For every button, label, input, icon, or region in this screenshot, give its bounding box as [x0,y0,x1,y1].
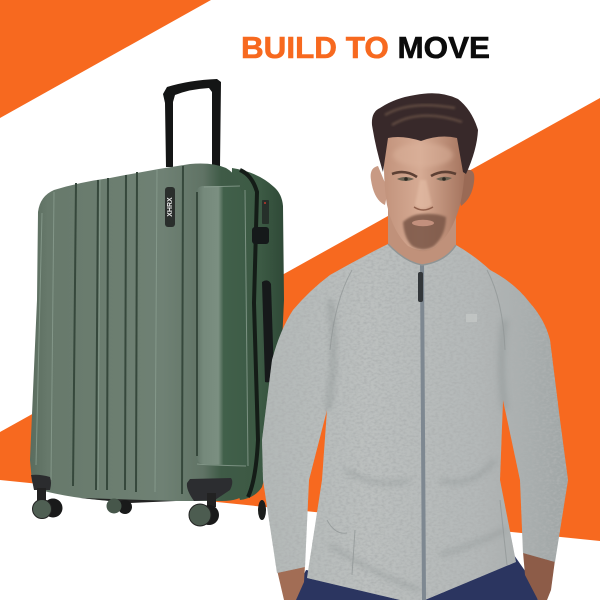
rear wheel behind [258,500,266,520]
lock [252,200,269,244]
zip pull [418,272,423,302]
forearm: left hand [277,565,305,600]
left wheel assembly [31,475,62,518]
case corner bumper [197,186,248,466]
shell light ridges [36,170,248,492]
middle wheel assembly [80,498,176,514]
forearm: right hand [523,552,555,600]
telescopic handle [163,79,221,167]
orange triangle: top left [0,0,211,118]
nose [415,180,432,208]
hair highlights [385,105,462,125]
side carry handle [262,280,274,382]
jacket seams and folds [327,270,507,575]
case front shell [30,164,252,501]
neck [388,205,456,271]
brand badge: XHRX [167,197,174,217]
jacket soft shadows [328,300,505,590]
suitcase [30,79,284,526]
beard [403,214,446,250]
brand badge [165,187,175,227]
ears [371,166,388,205]
jacket [262,244,568,600]
man [262,93,568,600]
zipper seam [240,170,258,497]
orange diagonal band [0,98,600,541]
forehead shading [393,143,453,167]
zip [422,265,424,600]
trousers [292,555,538,600]
case side panel [225,168,284,500]
collar [388,244,456,265]
lips [412,220,434,226]
face [384,125,465,250]
right wheel assembly [187,478,232,526]
title: BUILD TO MOVE [241,30,490,65]
chest logo [466,314,477,322]
hair [372,93,478,174]
eyes and brows [392,172,456,181]
shell grooves [73,166,197,494]
